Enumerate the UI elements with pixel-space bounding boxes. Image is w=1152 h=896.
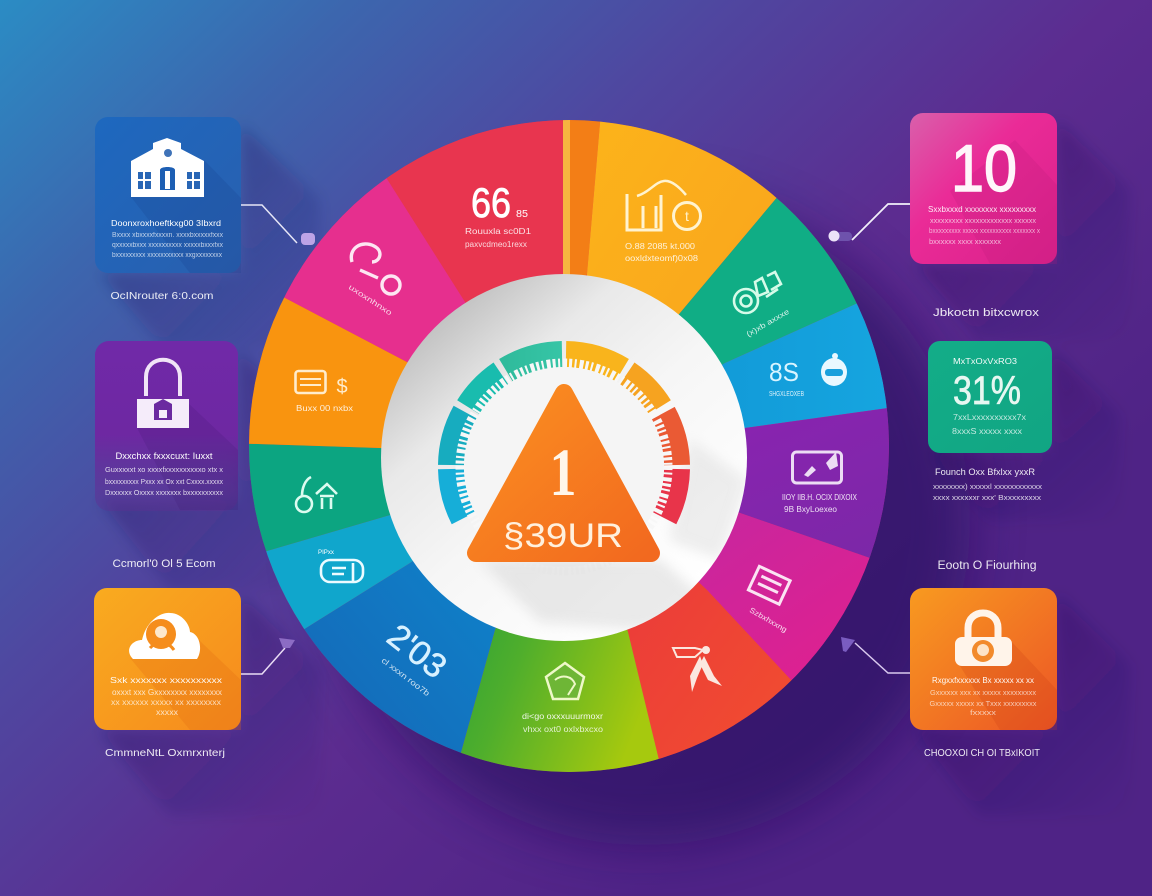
wedge content: green house and key icon — [296, 477, 337, 512]
wedge: magenta upper — [284, 178, 466, 362]
text block: below green card: xxxxxxxx) xxxxxl xxxxxxxxxxxx — [933, 482, 1042, 491]
wedge: green upper — [678, 198, 857, 365]
panel: green card: 8xxxS xxxxx xxxx — [952, 427, 1022, 436]
wedge content: red 66: paxvcdmeo1rexx — [465, 240, 527, 249]
wedge content: lime pentagon icon — [522, 663, 604, 734]
wedge content: lime pentagon icon: di<go oxxxuuurmoxr — [522, 711, 603, 721]
panel: pink card: bxxxxxx xxxx xxxxxxx — [929, 237, 1001, 246]
orange triangle badge: 1 — [550, 434, 576, 510]
panel: red-orange card — [910, 588, 1057, 730]
panel: green card — [928, 341, 1052, 453]
wedge content: orange card icon: $ — [336, 376, 348, 398]
wedge content: blue 8S — [769, 353, 847, 398]
wedge: red top-left — [387, 120, 563, 178]
wedge content: red 66 — [465, 179, 532, 249]
connector: pink card — [828, 204, 910, 242]
wedge content: red 66: 85 — [516, 209, 528, 220]
panel: orange card: oxxxt xxx Gxxxxxxxx xxxxxxxx — [112, 688, 222, 697]
panel: purple card: Guxxxxxt xo xxxxfxxxxxxxxxxo xtx x — [105, 465, 223, 474]
panel: purple card: Dxxchxx fxxxcuxt: Iuxxt — [116, 451, 213, 461]
gauge shadow — [672, 447, 744, 556]
wedge: blue upper — [722, 304, 887, 428]
wedge content: yellow house icon: ooxldxteomf)0x08 — [625, 254, 699, 263]
panel: blue card — [95, 117, 241, 273]
wedge content: blue 8S: 8S — [769, 357, 799, 387]
wedge content: yellow house icon — [625, 181, 700, 263]
triangle shadow — [488, 560, 694, 630]
panel: blue card: Bxxxx xbxxxxfxxxxn. xxxxbxxxxxfxxx — [112, 232, 223, 239]
caption: green card: Eootn O Fiourhing — [938, 560, 1036, 572]
panel: pink card: xxxxxxxxx xxxxxxxxxxxxx xxxxxx — [930, 216, 1036, 225]
panel: red-orange card: Gxxxxx xxxxx xx Txxx xxxxxxxxx — [930, 699, 1037, 708]
panel: pink card: bxxxxxxxxx xxxxx xxxxxxxxxx xxxxxxx x — [929, 226, 1040, 235]
icon: padlock round — [955, 613, 1012, 666]
wedge content: magenta lower ticket icon — [748, 566, 790, 634]
wedge content: lime pentagon icon: vhxx oxt0 oxlxbxcxo — [523, 725, 604, 734]
panel: pink card: 10 — [951, 131, 1017, 205]
panel: purple card — [95, 341, 238, 511]
wedge: green left — [249, 444, 390, 552]
caption: blue card: OcINrouter 6:0.com — [110, 290, 214, 302]
icon: blob — [821, 353, 847, 386]
panel: orange card: Sxk xxxxxxx xxxxxxxxxx — [110, 675, 223, 685]
gauge teeth — [460, 363, 668, 571]
wedge content: blue year 2'03: 2'03 — [380, 617, 454, 686]
wedge: orange left — [249, 298, 408, 448]
panel: blue card: qxxxxxbxxx xxxxxxxxxx xxxxxbxxxfxx — [112, 242, 223, 249]
connector: orange card — [241, 638, 295, 674]
wedge content: red 66: 66 — [471, 179, 511, 226]
wedge content: magenta lower ticket icon: Szbxhxxng — [748, 605, 789, 634]
wedge content: red 66: Rouuxla sc0D1 — [465, 227, 532, 236]
panel: red-orange card: Gxxxxxx xxx xx xxxxx xxxxxxxxx — [930, 688, 1036, 697]
caption: purple card: Ccmorl'0 Ol 5 Ecom — [112, 558, 216, 570]
card shadows — [100, 120, 1130, 815]
wedge content: purple tablet icon: IIOY IIB.H. OCIX DIXOIX — [782, 493, 858, 502]
panel: green card: 7xxLxxxxxxxxxx7x — [953, 413, 1026, 422]
caption: pink card: Jbkoctn bitxcwrox — [933, 307, 1040, 319]
panel: purple card: Dxxxxxx Oxxxx xxxxxxx bxxxxxxxxxx — [105, 488, 223, 497]
panel: orange card: xx xxxxxx xxxxx xx xxxxxxxx — [111, 698, 221, 707]
wedge content: cyan chat icon: PIPxx — [318, 550, 334, 556]
panel: green card: MxTxOxVxRO3 — [953, 356, 1017, 366]
wedge content: orange card icon: Buxx 00 nxbx — [296, 404, 353, 413]
wedge content: blue 8S: SHGXLEOXEB — [769, 389, 804, 398]
wedge content: green gear icon: (x)xb axxxe — [745, 307, 791, 339]
panel: orange card — [94, 588, 241, 730]
wedge: yellow — [586, 122, 776, 314]
wedge content: magenta upper link icon: uxoxnhnxo — [347, 283, 394, 317]
panel: red-orange card: fxxxxx — [970, 708, 996, 717]
wedge content: cyan chat icon — [318, 550, 363, 582]
centre disc — [381, 274, 747, 641]
gauge segments — [451, 354, 677, 518]
wedge content: red lower figure icon — [673, 646, 722, 692]
donut wheel — [249, 120, 889, 772]
panel: blue card: bxxxxxxxxx xxxxxxxxxxx xxgxxxxxxxx — [112, 252, 222, 259]
panel: pink card — [910, 113, 1057, 264]
panel: orange card: xxxxx — [156, 708, 178, 717]
wedge content: purple tablet icon: 9B BxyLoexeo — [784, 505, 838, 514]
wedge content: green gear icon — [734, 272, 791, 339]
wedge: cyan — [266, 515, 413, 629]
icon: padlock — [137, 360, 189, 428]
connector: blue card — [241, 205, 315, 245]
wedge content: orange card icon — [296, 371, 353, 413]
icon: cloud with person — [129, 613, 200, 659]
connector: red-orange card — [841, 637, 910, 673]
long shadow of the wheel — [320, 195, 970, 845]
text block: below green card: Founch Oxx Bfxlxx yxxR — [935, 467, 1036, 477]
panel: green card: 31% — [953, 369, 1021, 413]
panel: red-orange card: Rxgxxfxxxxxx Bx xxxxx xx xx — [932, 675, 1035, 685]
text block: below green card — [933, 467, 1042, 502]
wedge content: blue year 2'03: cl xxxn roo7b — [380, 656, 432, 698]
wedge: blue lower — [304, 561, 496, 753]
icon: house — [131, 138, 204, 197]
panel: pink card: Sxxbxxxd xxxxxxxx xxxxxxxxx — [928, 205, 1036, 214]
wedge: purple — [738, 408, 889, 558]
wedge content: yellow house icon: O.88 2085 kt.000 — [625, 242, 696, 251]
panel: purple card: bxxxxxxxxx Pxxx xx Ox xxt Cxxxx.xxxxx — [105, 477, 223, 486]
text block: below green card: xxxx xxxxxxr xxx' Bxxxxxxxxx — [933, 493, 1041, 502]
wedge content: yellow house icon: t — [685, 208, 689, 224]
wedge: yellow stripe — [563, 120, 570, 274]
caption: orange card: CmmneNtL Oxmrxnterj — [105, 747, 225, 759]
panel: blue card: Doonxroxhoeftkxg00 3Ibxrd — [111, 219, 221, 228]
orange triangle badge: §39UR — [503, 517, 623, 555]
orange triangle badge — [476, 393, 651, 555]
wedge content: purple tablet icon — [782, 452, 858, 514]
wedge content: magenta upper link icon — [347, 244, 400, 317]
wedge: lime green — [461, 628, 659, 772]
wedge: dark orange stripe — [570, 120, 600, 276]
wedge: red lower — [628, 582, 792, 759]
caption: red-orange card: CHOOXOI CH OI TBxIKOIT — [924, 747, 1041, 759]
wedge: magenta lower — [698, 512, 870, 680]
